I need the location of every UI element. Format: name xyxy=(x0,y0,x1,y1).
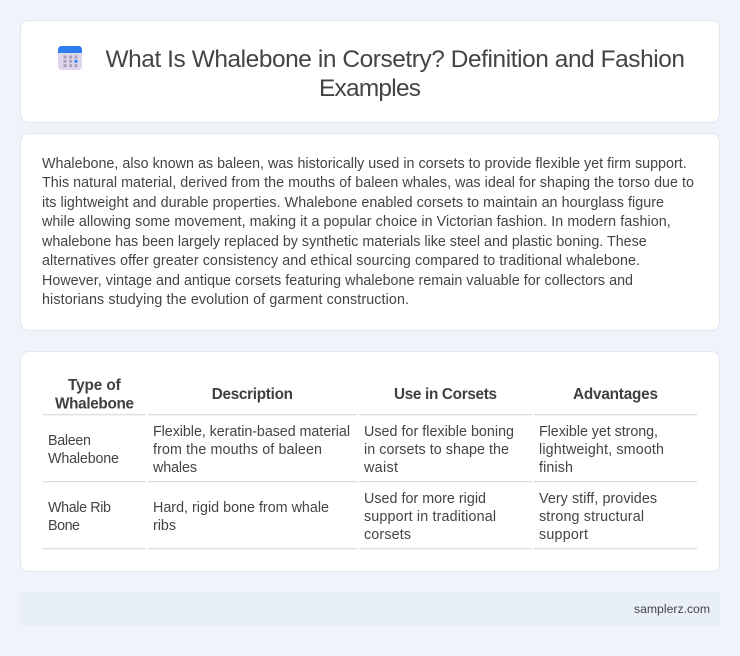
text block: description: However, vintage and antique corsets featuring whalebone remain valuable for collectors and xyxy=(42,273,633,289)
text block: description xyxy=(41,156,694,308)
panel: description card xyxy=(20,134,720,330)
icon: calendar xyxy=(58,46,82,70)
text block: description: historians studying the evolution of garment construction. xyxy=(42,292,409,308)
panel: title card xyxy=(20,20,720,122)
table row: baleen whalebone: Flexible yet strong, xyxy=(539,424,658,440)
table row: baleen whalebone: finish xyxy=(539,460,573,476)
table row: baleen whalebone: from the mouths of baleen xyxy=(153,442,322,458)
table row: whale rib bone xyxy=(48,491,657,543)
panel: table card xyxy=(20,352,720,572)
table header: Type of xyxy=(68,377,122,394)
table header: Use in Corsets xyxy=(394,386,497,403)
table header: Advantages xyxy=(573,386,658,403)
table row: baleen whalebone: lightweight, smooth xyxy=(539,442,664,458)
text block: description: alternatives offer greater consistency and ethical sourcing compared to traditional whalebone. xyxy=(42,253,640,269)
footer source text: samplerz.com xyxy=(634,602,710,616)
table row: baleen whalebone: Used for flexible boning xyxy=(364,424,514,440)
table row: whale rib bone: ribs xyxy=(153,518,176,534)
text block: description: This natural material, derived from the mouths of baleen whales, was ideal for shaping the torso due to xyxy=(42,175,694,191)
table row: whale rib bone: Used for more rigid xyxy=(364,491,486,507)
table row: whale rib bone: strong structural xyxy=(539,509,644,525)
table row: whale rib bone: Hard, rigid bone from whale xyxy=(153,500,329,516)
table row: baleen whalebone: Flexible, keratin-based material xyxy=(153,424,350,440)
title xyxy=(106,46,685,102)
table row: whale rib bone: Bone xyxy=(48,518,80,534)
title: What Is Whalebone in Corsetry? Definition and Fashion xyxy=(106,46,685,73)
table row: baleen whalebone: Baleen xyxy=(48,433,91,449)
footer bar xyxy=(20,592,720,626)
table row: whale rib bone: corsets xyxy=(364,527,411,543)
table row: whale rib bone: Whale Rib xyxy=(48,500,111,516)
text block: description: its lightweight and durable properties. Whalebone enabled corsets to maintain an hourglass figure xyxy=(42,195,664,211)
table row: baleen whalebone: in corsets to shape the xyxy=(364,442,509,458)
table row: whale rib bone: support xyxy=(539,527,588,543)
text block: description: Whalebone, also known as baleen, was historically used in corsets to provide flexible yet firm support. xyxy=(42,156,687,172)
table row: whale rib bone: Very stiff, provides xyxy=(539,491,657,507)
table header: Description xyxy=(212,386,293,403)
table row: whale rib bone: support in traditional xyxy=(364,509,496,525)
table header: Whalebone xyxy=(55,396,134,412)
table row: baleen whalebone: whales xyxy=(152,460,197,476)
text block: description: whalebone has been largely replaced by synthetic materials like steel and plastic boning. These xyxy=(41,234,647,250)
table row: baleen whalebone xyxy=(48,424,664,476)
text block: description: while allowing some movement, making it a popular choice in Victorian fashion. In modern fashion, xyxy=(41,214,671,230)
table header xyxy=(55,377,658,412)
title: Examples xyxy=(319,75,421,102)
table row: baleen whalebone: waist xyxy=(363,460,398,476)
table row: baleen whalebone: Whalebone xyxy=(48,451,119,467)
